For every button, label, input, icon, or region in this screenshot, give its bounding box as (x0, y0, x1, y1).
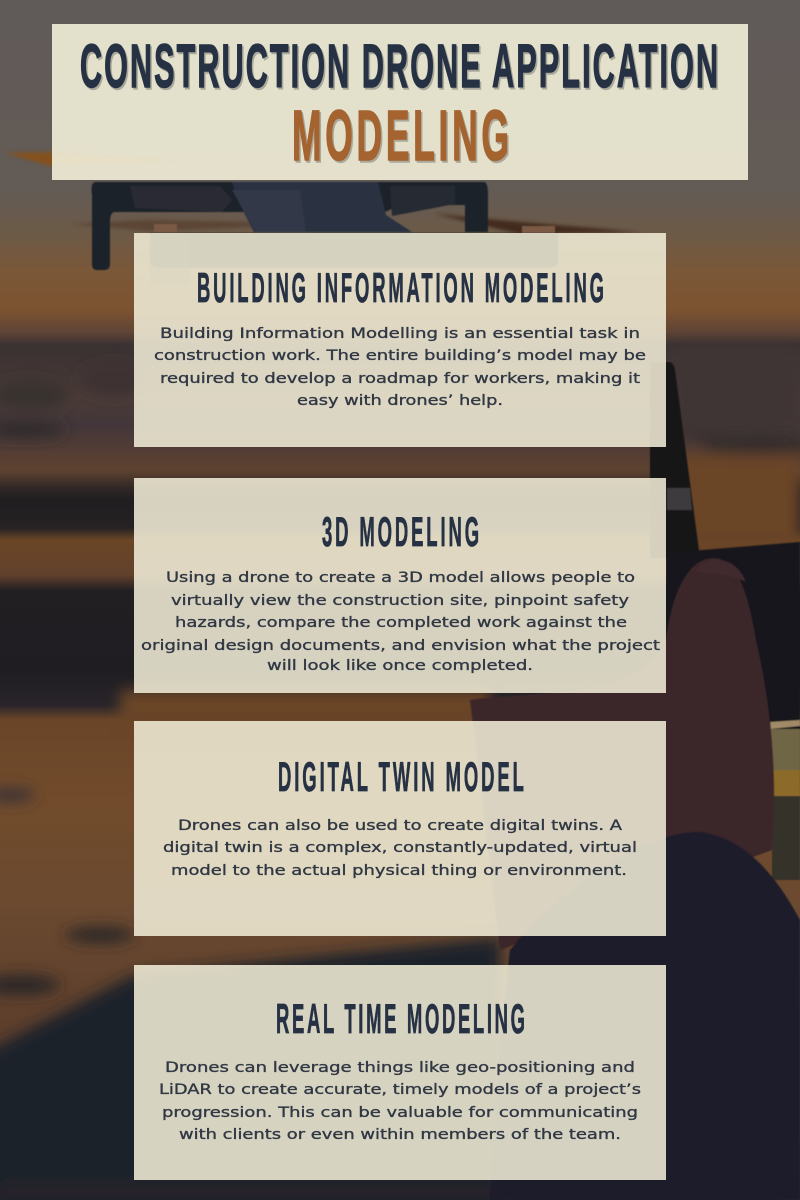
heading: 3D MODELING (322, 508, 479, 555)
body text: Using a drone to create a 3D model allows people to (166, 570, 635, 586)
body text (141, 570, 660, 674)
heading: DIGITAL TWIN MODEL (278, 753, 524, 800)
jacket sleeve (490, 832, 800, 1200)
body text: with clients or even within members of the team. (179, 1127, 621, 1143)
panel: building information modeling (134, 233, 666, 447)
body text: will look like once completed. (267, 658, 533, 674)
title line 1: CONSTRUCTION DRONE APPLICATION (80, 33, 718, 101)
title line 2: MODELING (292, 95, 509, 175)
body text: Building Information Modelling is an essential task in (160, 326, 640, 342)
panel: 3D modeling (134, 478, 666, 693)
body text: hazards, compare the completed work against the (175, 615, 627, 631)
body text: model to the actual physical thing or environment. (171, 863, 627, 879)
panel: real time modeling (134, 965, 666, 1180)
body text: easy with drones’ help. (297, 393, 503, 409)
body text: virtually view the construction site, pinpoint safety (171, 593, 630, 609)
body text: required to develop a roadmap for workers, making it (160, 371, 640, 387)
propeller blades (5, 152, 640, 234)
body text: Drones can leverage things like geo-positioning and (165, 1060, 635, 1076)
phone and controller (650, 362, 800, 880)
drone (5, 152, 640, 285)
body text: Drones can also be used to create digital twins. A (178, 818, 622, 834)
hand and thumb (470, 558, 774, 950)
body text (159, 1060, 641, 1143)
panel: digital twin model (134, 721, 666, 936)
body text: progression. This can be valuable for communicating (162, 1105, 638, 1121)
body text (163, 818, 637, 879)
body text: LiDAR to create accurate, timely models of a project’s (159, 1082, 641, 1098)
body text: construction work. The entire building’s model may be (154, 348, 646, 364)
title panel (52, 24, 748, 180)
heading: BUILDING INFORMATION MODELING (197, 264, 604, 311)
body text: original design documents, and envision what the project (141, 638, 660, 654)
body text: digital twin is a complex, constantly-updated, virtual (163, 840, 637, 856)
body text (154, 326, 646, 409)
heading: REAL TIME MODELING (276, 995, 525, 1042)
